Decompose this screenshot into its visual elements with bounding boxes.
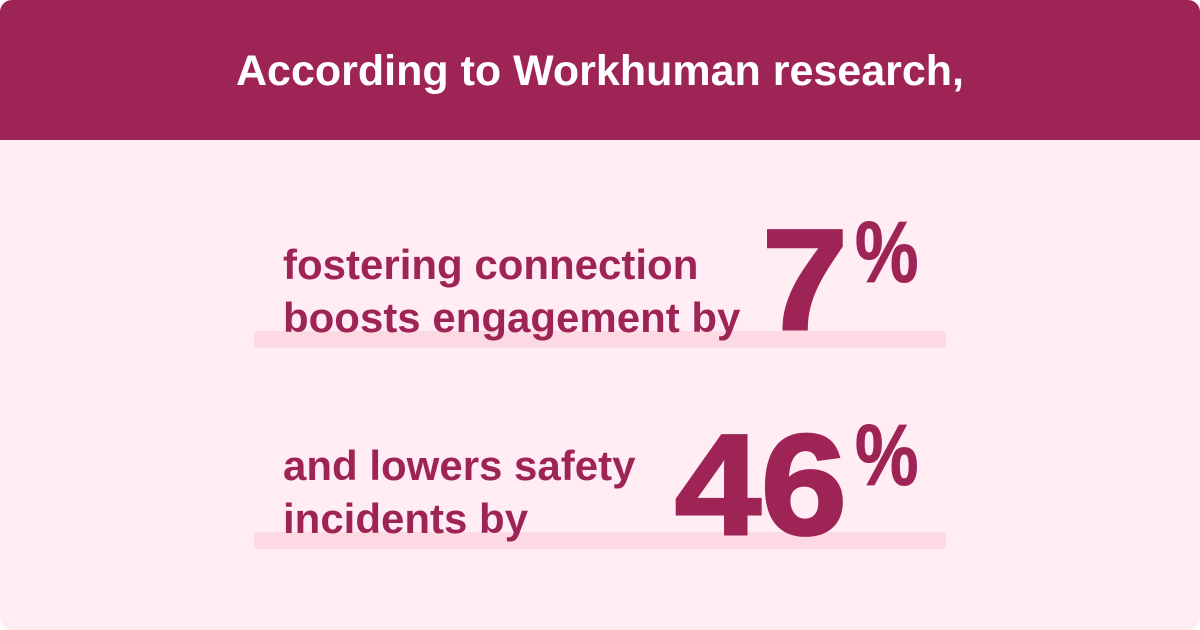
stat: 7: 7 [762, 201, 848, 360]
text: safety: incidents by [283, 495, 528, 542]
text: engagement: fostering connection [283, 241, 698, 288]
highlight bar 2 [254, 532, 946, 549]
text: engagement [283, 241, 740, 341]
stat: 46: 46 [675, 406, 847, 565]
percent 1: % [855, 205, 918, 301]
percent 2: % [855, 408, 918, 504]
title: According to Workhuman research, [236, 47, 964, 95]
header band [0, 0, 1200, 140]
text: safety [283, 442, 636, 542]
text: safety: and lowers safety [283, 442, 635, 489]
highlight bar 1 [254, 331, 946, 348]
text: engagement: boosts engagement by [283, 294, 740, 341]
